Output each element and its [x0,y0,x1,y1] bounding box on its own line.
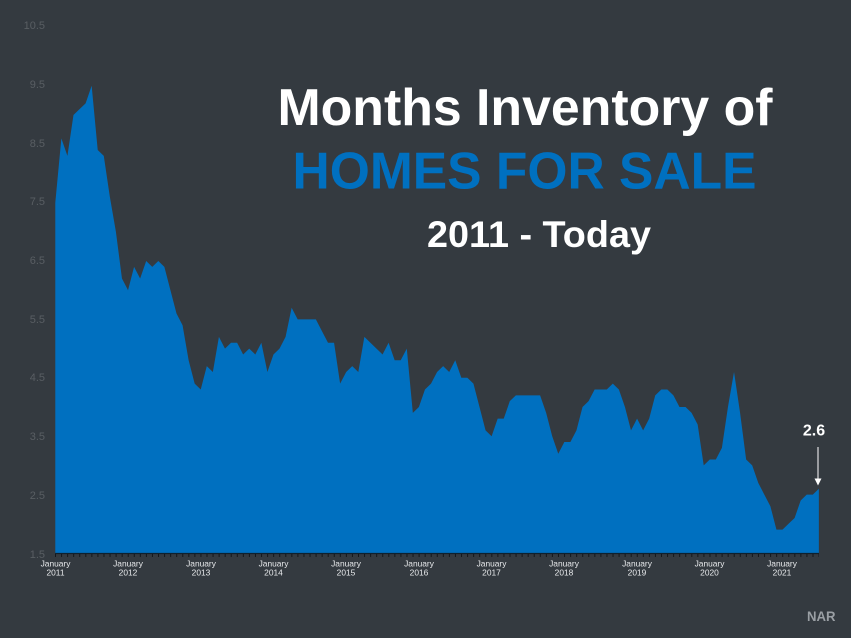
x axis labels: 2011 [46,568,65,578]
x axis line and monthly ticks [55,554,819,556]
subtitle: date range: 2011 - Today [427,214,651,255]
y axis labels: 5.5 [30,314,45,326]
x axis labels: 2021 [773,568,792,578]
x axis labels: January [549,558,580,568]
y axis labels: 6.5 [30,255,45,267]
y axis labels: 10.5 [24,20,45,32]
x axis labels: 2017 [482,568,501,578]
x axis labels: January [404,558,435,568]
x axis labels: 2019 [628,568,647,578]
x axis labels: January [695,558,725,568]
x axis labels: 2018 [555,568,574,578]
y axis labels: 3.5 [30,431,45,443]
x axis labels: January [186,558,217,568]
y axis labels: 8.5 [30,138,45,150]
x axis labels: January [622,558,653,568]
x axis labels: January [477,558,507,568]
area chart: months inventory [55,86,819,553]
x axis labels: January [331,558,362,568]
title: homes for sale: HOMES FOR SALE [292,142,756,200]
x axis labels [41,558,798,578]
x axis labels: January [41,558,71,568]
y axis labels: 1.5 [30,549,45,561]
callout: latest value 2.6: 2.6 [803,422,825,440]
y axis labels: 9.5 [30,79,45,91]
x axis labels: January [259,558,289,568]
y axis labels: 4.5 [30,372,45,384]
x axis labels: 2014 [264,568,283,578]
y axis labels: 2.5 [30,490,45,502]
source: NAR: NAR [807,608,836,624]
x axis labels: January [767,558,798,568]
y axis labels: 7.5 [30,196,45,208]
callout: latest value 2.6 [803,422,825,486]
x axis labels: 2012 [119,568,138,578]
y axis labels [24,20,45,561]
x axis labels: 2020 [700,568,719,578]
title: months inventory of: Months Inventory of [278,79,773,137]
x axis labels: 2015 [337,568,356,578]
x axis labels: 2016 [410,568,429,578]
x axis labels: January [113,558,144,568]
x axis labels: 2013 [192,568,211,578]
